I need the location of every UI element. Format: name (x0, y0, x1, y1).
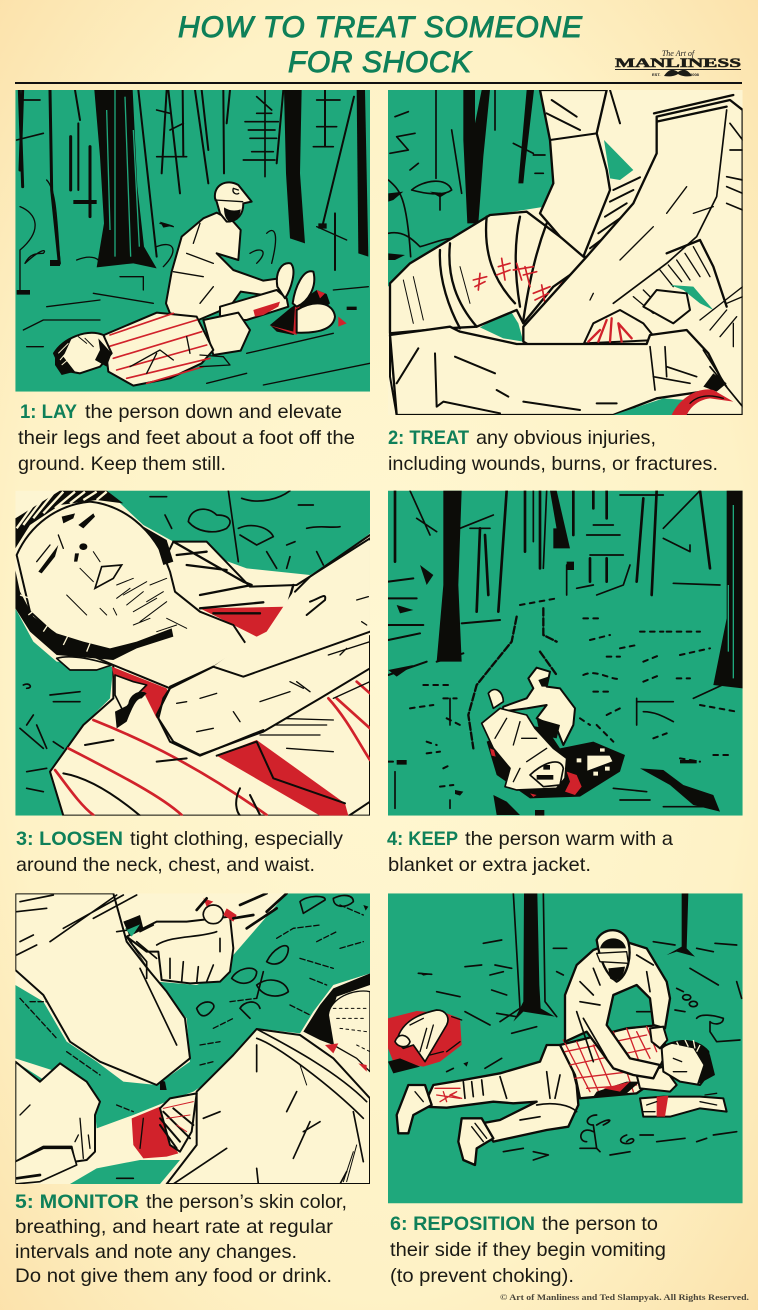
panel 4 caption: blanket or extra jacket. (388, 854, 591, 876)
lower hand (15, 1062, 100, 1184)
lower arm (390, 327, 743, 415)
trees (500, 893, 695, 1022)
mouth (95, 565, 122, 588)
shirt and collar (50, 538, 370, 816)
panel 3 caption: tight clothing, especially (130, 828, 343, 850)
panel 6 caption: (to prevent choking). (390, 1265, 574, 1287)
panel 5 caption: intervals and note any changes. (15, 1241, 297, 1263)
title: FOR SHOCK (288, 46, 473, 79)
panel 6 caption: 6: REPOSITION (390, 1213, 535, 1235)
blanket (167, 1029, 370, 1184)
panel 1 caption: ground. Keep them still. (18, 453, 226, 475)
panel 4 caption: the person warm with a (465, 828, 673, 850)
panel 4: keep warm (388, 491, 743, 816)
knee, socks and hand (584, 240, 743, 347)
logo: The Art of Manliness: EST. (652, 72, 660, 77)
patient head (303, 973, 370, 1072)
backpack (388, 1010, 462, 1073)
panel 3: loosen clothing (15, 491, 370, 816)
logo: The Art of Manliness (615, 49, 741, 77)
panel 5 caption: the person’s skin color, (146, 1191, 347, 1213)
panel 2 caption (388, 427, 718, 475)
panel 1 caption: 1: LAY (20, 401, 77, 423)
kneeling helper (166, 182, 279, 320)
patient lying down (54, 263, 347, 386)
helper arm and fist (157, 535, 370, 756)
forest trees (17, 90, 368, 270)
panel 3 caption: around the neck, chest, and waist. (16, 854, 315, 876)
panel 5 caption: breathing, and heart rate at regular (15, 1216, 334, 1238)
patient legs (397, 1045, 578, 1165)
panel 1 caption (18, 401, 355, 475)
header rule (15, 82, 742, 84)
patient torso and arm (560, 1025, 727, 1117)
panel 6 caption (390, 1213, 666, 1287)
panel 5 caption (15, 1191, 347, 1287)
red sock and bandage (132, 1093, 197, 1158)
leaves and plants (20, 895, 368, 1178)
panel 6 caption: the person to (542, 1213, 658, 1235)
forest (388, 491, 743, 688)
trees and seedlings (388, 90, 545, 260)
green grass areas (15, 491, 370, 816)
helper hand with watch (127, 893, 287, 983)
logo: The Art of Manliness: MANLINESS (615, 55, 741, 70)
title (178, 11, 583, 79)
panel 5 caption: Do not give them any food or drink. (15, 1265, 332, 1287)
panel 6: reposition (388, 893, 743, 1203)
ground plants and grass (17, 180, 370, 385)
logo: The Art of Manliness: The Art of (662, 49, 696, 58)
helper knee (15, 893, 190, 1085)
panel 4 caption (387, 828, 673, 876)
panel 3 caption: 3: LOOSEN (16, 828, 123, 850)
panel 1 caption: their legs and feet about a foot off the (18, 427, 355, 449)
eyes and brow (37, 513, 95, 573)
panel 2 caption: 2: TREAT (388, 427, 469, 449)
panel 2 caption: any obvious injuries, (476, 427, 656, 449)
path edges and ground (388, 528, 737, 816)
panel 2 caption: including wounds, burns, or fractures. (388, 453, 718, 475)
panel 5 caption: 5: MONITOR (15, 1191, 139, 1213)
panel 6 caption: their side if they begin vomiting (390, 1239, 666, 1261)
blanket-covered patient (482, 690, 625, 798)
leaves and grass (20, 491, 340, 792)
small helper figure (502, 668, 575, 745)
green ground (15, 893, 370, 1184)
helper arms (523, 90, 743, 415)
copyright: © Art of Manliness and Ted Slampyak. All Rights Reserved. (500, 1292, 749, 1302)
panel 1: lay the person down (15, 90, 370, 392)
face and head (15, 491, 247, 688)
panel 3 caption (16, 828, 343, 876)
panel 1 caption: the person down and elevate (85, 401, 342, 423)
bandaged leg (390, 212, 587, 333)
panel 5: monitor (15, 893, 370, 1184)
panel 4 caption: 4: KEEP (387, 828, 458, 850)
green forest background (388, 90, 634, 410)
grass and plants (418, 940, 742, 1160)
logo: The Art of Manliness: 2008 (690, 72, 700, 77)
helper (565, 930, 670, 1078)
title: HOW TO TREAT SOMEONE (178, 11, 583, 44)
panel 2: treat injuries (388, 90, 743, 415)
